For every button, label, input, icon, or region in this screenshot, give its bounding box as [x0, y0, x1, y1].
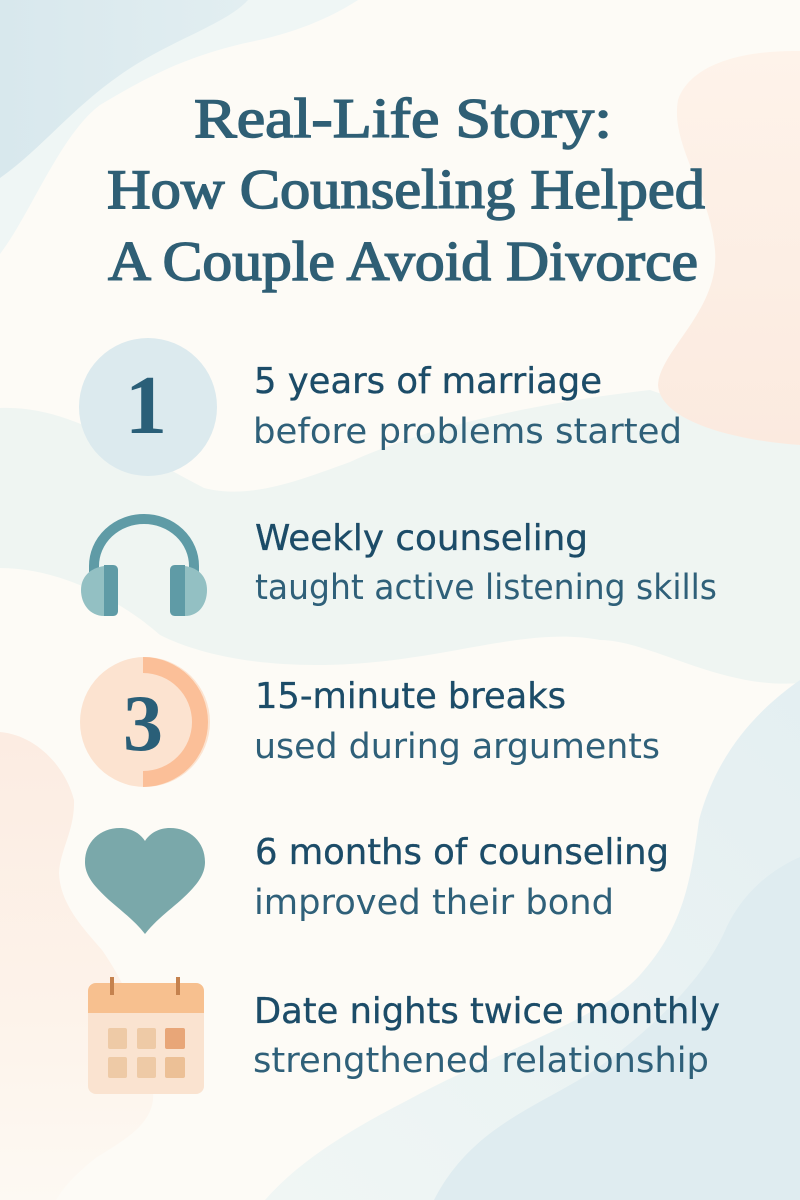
icon: number 3 progress ring: 3	[123, 680, 163, 768]
text: 6 months of counseling	[254, 832, 669, 923]
text: 6 months of counseling: 6 months of counseling	[255, 832, 669, 873]
icon: calendar	[88, 977, 204, 1094]
text: weekly counseling: taught active listening skills	[255, 568, 717, 608]
title	[107, 88, 705, 293]
item 5: date nights	[88, 977, 720, 1094]
item 1: years of marriage	[79, 338, 682, 476]
text: 15-minute breaks: used during arguments	[254, 727, 660, 767]
title: How Counseling Helped	[107, 159, 705, 221]
text: date nights twice monthly: strengthened relationship	[253, 1041, 709, 1081]
text: 5 years of marriage	[253, 361, 682, 452]
title: A Couple Avoid Divorce	[108, 231, 698, 293]
icon: headphones	[81, 519, 207, 616]
icon: number 1 circle: 1	[125, 359, 167, 452]
item 3: 15-minute breaks	[80, 657, 660, 787]
text: date nights twice monthly: Date nights twice monthly	[254, 991, 720, 1032]
text: 15-minute breaks	[254, 676, 660, 767]
icon: number 3 progress ring	[80, 657, 210, 787]
text: weekly counseling: Weekly counseling	[255, 518, 588, 559]
text: 15-minute breaks: 15-minute breaks	[255, 676, 566, 717]
text: 5 years of marriage: before problems started	[253, 412, 682, 452]
icon: number 1 circle	[79, 338, 217, 476]
icon: heart	[85, 828, 205, 934]
text: weekly counseling	[255, 518, 717, 608]
item 2: weekly counseling	[81, 518, 717, 616]
text: date nights twice monthly	[253, 991, 720, 1081]
item 4: 6 months of counseling	[85, 828, 669, 934]
text: 6 months of counseling: improved their bond	[254, 883, 614, 923]
text: 5 years of marriage: 5 years of marriage	[254, 361, 602, 402]
title: Real-Life Story:	[194, 88, 612, 150]
